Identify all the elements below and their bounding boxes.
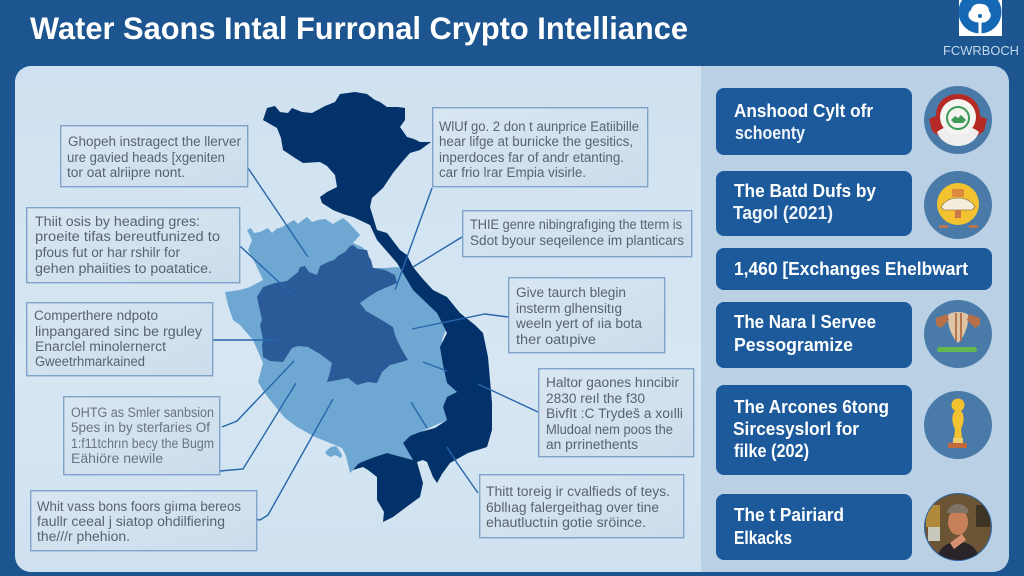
card 6: Elkacks [734,527,792,548]
callout: left 3: Gweetrhmarkained [35,354,145,369]
icon: logo [943,0,1019,58]
callout: left 3: linpangared sinc be rguley [35,324,202,339]
callout: left 2: Thiit osis by heading gres: [35,214,200,229]
card 4 [716,302,912,368]
callout: right 4: Mludoal nem poos the [546,422,673,437]
card 1: Anshood Cylt ofr [734,100,873,121]
icon: gold figure badge [924,391,992,459]
map region: mid blue [257,245,408,385]
card 1: schoenty [735,123,805,143]
callout: left 5: Whit vass bons foors giıma bereos [37,499,241,514]
callout: right 5 [480,475,684,538]
callout: right 1 [433,108,648,187]
card 5: Sircesyslorl for [733,418,859,439]
panel: right sidebar [660,66,1009,572]
callout: right 2 [463,211,692,257]
icon: yellow building badge [924,171,992,239]
card 2 [716,171,912,236]
icon: rocket trophy badge [924,300,992,368]
callout: left 3: Enarclel minolernerct [35,339,166,354]
callout: right 4 [539,369,694,457]
card 2: The Batd Dufs by [734,180,877,201]
callout: left 2: proeite tifas bereutfunized to [35,229,220,244]
card 4: The Nara l Servee [734,311,876,332]
card 5: The Arcones 6tong [734,396,889,417]
map region: islets [325,446,342,458]
card 6 [716,494,912,560]
callout: right 1: hear lifge at burıicke the gesitics, [439,134,633,149]
callout: left 3: Comperthere ndpoto [34,308,158,323]
callout: left 1: Ghopeh instragect the llerver [68,134,242,149]
icon: person photo badge [924,493,992,562]
card 4: Pessogramize [734,334,853,355]
icon: logo: FCWRBOCH [943,44,1019,58]
callout: left 4: 1:f11tchrın becy the Bugm [71,436,214,451]
callout: right 3: insterm glhensitıg [516,301,622,316]
callout: left 1 [61,126,248,187]
card 6: The t Pairiard [734,504,844,525]
callout: right 1: WlUf go. 2 don t aunprice Eatiibille [439,119,639,134]
callout: right 4: Haltor gaones hıncibir [546,375,680,390]
callout: right 4: BivfIt :C Trydeš a xoılli [546,406,683,421]
card 5: filke (202) [734,440,809,461]
callout: right 5: 6bllıag falergeithag over tine [486,500,659,515]
map [225,92,492,522]
callout: left 5: the///r phehion. [37,529,130,544]
map region: dark north and coast [263,92,492,522]
callout: right 2: Sdot byour seqeilence im planticars [470,233,684,248]
map region: light blue [225,217,457,473]
callout: left 2 [27,208,240,283]
card 1 [716,88,912,155]
callout: left 2: gehen phaiities to poatatice. [35,261,212,276]
callout: left 1: tor oat alriipre nont. [67,165,185,180]
callout: left 4: Eähiöre newile [71,451,163,466]
callout: right 4: 2830 reıl the f30 [546,391,645,406]
callout: left 4: OHTG as Smler sanbsion [71,405,214,420]
callout: right 3: Give taurch blegin [516,285,626,300]
card 3 [716,248,992,290]
connector lines [213,168,538,520]
callout: left 5: faullr ceeal j siatop ohdilfiering [37,514,225,529]
callout: left 1: ure gavied heads [xgeniten [67,150,225,165]
title: Water Saons Intal Furronal Crypto Intelliance [30,10,688,46]
callout: left 3 [27,303,213,376]
callout: right 3: ther oatıpive [516,332,596,347]
callout: right 5: Thitt toreig ir cvalfieds of teys. [486,484,670,499]
card 2: Tagol (2021) [733,202,833,223]
callout: right 5: ehautluctıin gotie sröince. [486,515,646,530]
callout: right 3 [509,278,665,353]
callout: left 4: 5pes in by sterfaries Of [71,420,210,435]
callout: left 4 [64,397,220,475]
card 3: 1,460 [Exchanges Ehelbwart [734,258,968,279]
panel: map area [15,66,701,572]
callout: right 1: inperdoces far of andr etanting. [439,150,624,165]
callout: right 3: weeln yert of ıia bota [515,316,643,331]
callout: left 2: pfous fut or har rshilr for [35,245,181,260]
callout: right 2: THIE genre nibingrafıging the tterm is [470,217,682,232]
callout: right 1: car frio lrar Empia visirle. [439,165,586,180]
callout: right 4: an prrinethents [546,437,638,452]
callout: left 5 [31,491,257,551]
icon: helmet badge [924,86,992,154]
card 5 [716,385,912,475]
